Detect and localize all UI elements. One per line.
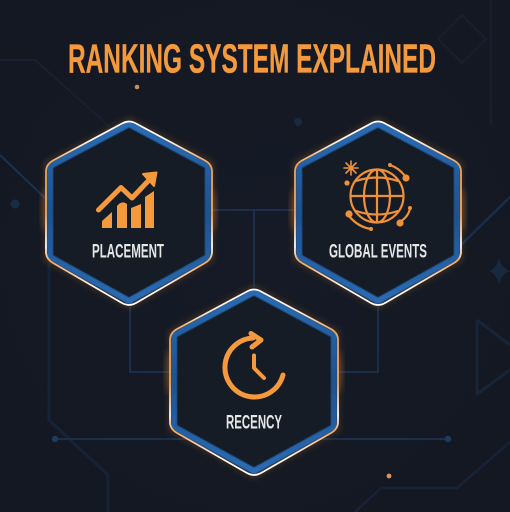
icon: rising bar chart with arrow [98,172,156,228]
accent dot: top [135,85,139,89]
panel: global events [290,119,466,307]
label: placement: PLACEMENT [92,242,164,262]
icon: globe with orbiting nodes [344,161,412,231]
panel: placement [41,119,217,307]
label: recency: RECENCY [226,412,282,434]
accent dot: bottom [387,474,391,478]
icon: clock with circular arrow [225,334,283,397]
label: global events: GLOBAL EVENTS [329,242,427,262]
panel: recency [165,287,343,477]
